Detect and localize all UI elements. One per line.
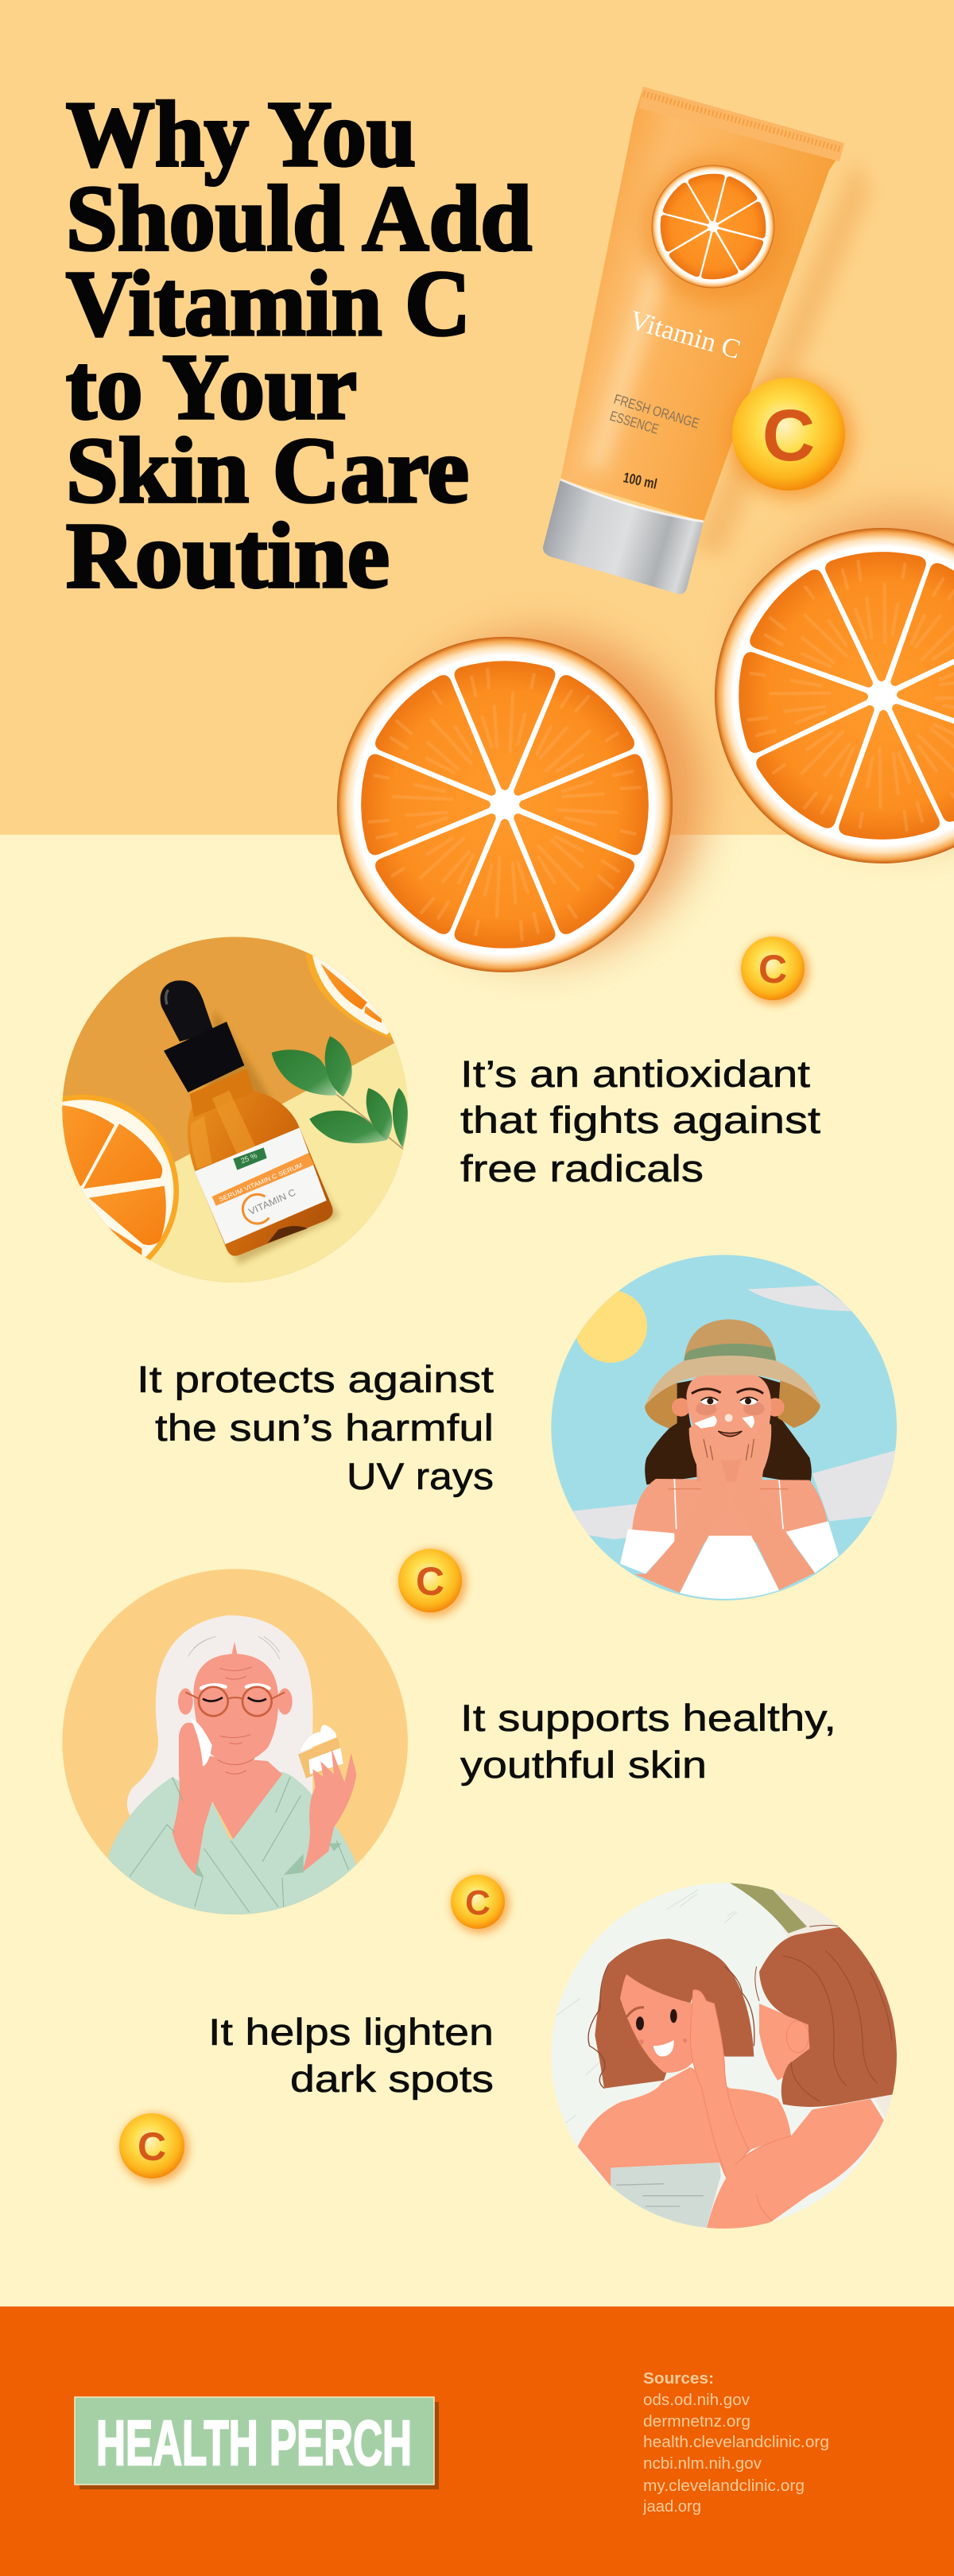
main cream background [0, 835, 954, 2307]
shadow: centre orange [378, 632, 704, 958]
logo: Health Perch [75, 2397, 439, 2489]
text: UV protection: UV rays [347, 1455, 494, 1497]
text: dark spots: It helps lighten [208, 2011, 494, 2053]
back person hair [759, 1926, 898, 2107]
sources list: health.clevelandclinic.org [643, 2434, 829, 2451]
icon: right orange slice [706, 519, 954, 872]
illustration: serum bottle [62, 937, 408, 1282]
icon: large vitamin C ball [731, 377, 852, 498]
sources list: my.clevelandclinic.org [643, 2477, 805, 2495]
icon: vitamin C ball small 1 [741, 937, 809, 1005]
title: to Your [66, 335, 357, 439]
text: UV protection: the sun’s harmful [155, 1406, 494, 1449]
tube brand text: Vitamin C [626, 305, 743, 365]
white top [680, 1536, 779, 1599]
hat [684, 1319, 777, 1362]
clouds [747, 1286, 855, 1311]
icon: centre orange slice [337, 637, 673, 972]
title: Should Add [66, 166, 532, 270]
text: antioxidant: free radicals [460, 1147, 704, 1189]
towel [611, 2163, 721, 2229]
illustration: serum bottle: 25 % [239, 1151, 258, 1165]
text: antioxidant: It’s an antioxidant [460, 1053, 810, 1095]
back person face [759, 2004, 809, 2081]
top background band [0, 0, 954, 835]
closed eyes [203, 1697, 266, 1701]
hands [688, 1426, 704, 1465]
body [578, 2067, 791, 2186]
robe [109, 1771, 356, 1916]
tube orange slice [644, 157, 782, 296]
tube body [560, 87, 844, 522]
smile [653, 2040, 674, 2057]
mouth [718, 1431, 742, 1437]
panel: youthful skin [61, 1568, 836, 1916]
robe sleeves and lines [196, 1843, 342, 1878]
bottle glass [188, 1091, 333, 1256]
text: UV protection [137, 1358, 494, 1497]
icon: vitamin C tube [543, 87, 871, 594]
eyes [636, 2016, 644, 2031]
text: youthful skin: It supports healthy, [460, 1697, 836, 1739]
icon: vitamin C ball small 4: C [138, 2124, 166, 2169]
shoulders [624, 1479, 831, 1542]
hand left [173, 1723, 213, 1875]
icon: vitamin C ball small 3 [451, 1875, 510, 1934]
face [620, 1974, 717, 2073]
panel: antioxidant [0, 936, 820, 1288]
jar [298, 1737, 343, 1779]
illustration: woman at mirror [550, 1882, 898, 2230]
brim underside [645, 1382, 677, 1429]
ears and face [672, 1398, 690, 1417]
sources list [642, 2370, 829, 2516]
title: Skin Care [66, 418, 469, 522]
neck [696, 1458, 762, 1480]
ears and face [178, 1688, 193, 1715]
tube description: FRESH ORANGE [612, 391, 701, 432]
panel: UV protection [137, 1254, 898, 1602]
hand [690, 1990, 749, 2181]
icon: vitamin C ball small 2 [398, 1549, 467, 1617]
title [66, 82, 532, 607]
front hair [595, 1938, 754, 2089]
hair back [645, 1380, 696, 1485]
title: Routine [66, 503, 390, 607]
dropper collar [164, 1022, 244, 1092]
slice top right [306, 952, 391, 1038]
footer band [0, 2306, 954, 2576]
hand right [302, 1748, 356, 1872]
back person body [706, 2099, 884, 2230]
title: Vitamin C [66, 251, 471, 355]
text: dark spots: dark spots [290, 2058, 494, 2100]
arms [634, 1541, 704, 1593]
sunscreen [694, 1416, 717, 1429]
text: antioxidant: that fights against [460, 1099, 820, 1141]
sources list: ods.od.nih.gov [643, 2392, 750, 2409]
icon: vitamin C ball small 2: C [416, 1559, 444, 1604]
text: youthful skin [460, 1697, 836, 1786]
illustration: serum bottle: VITAMIN C [247, 1186, 297, 1217]
tube volume: 100 ml [622, 469, 658, 492]
tube description: ESSENCE [608, 408, 661, 437]
dropper bulb [161, 980, 214, 1042]
tube crimp [639, 87, 844, 161]
text: UV protection: It protects against [137, 1358, 494, 1400]
sources list: Sources: [643, 2370, 714, 2388]
bottle shadow [199, 1010, 339, 1264]
title: Why You [66, 82, 416, 186]
icon: vitamin C ball small 4 [119, 2113, 189, 2183]
leaves [272, 1036, 408, 1149]
panel: dark spots [208, 1882, 898, 2230]
brows [201, 1686, 269, 1688]
glasses [199, 1687, 228, 1716]
shadow: right orange [741, 509, 954, 840]
brows and eyes [692, 1389, 763, 1394]
slice bottom left [62, 1094, 179, 1260]
illustration: older woman with cream [61, 1568, 409, 1916]
illustration: serum bottle: SERUM VITAMIN C SERUM [218, 1162, 304, 1204]
sources list: ncbi.nlm.nih.gov [643, 2455, 762, 2473]
icon: vitamin C ball small 1: C [758, 947, 787, 991]
bottle label [195, 1127, 327, 1244]
icon: large vitamin C ball: C [762, 395, 815, 476]
neck [204, 1755, 282, 1839]
hair [127, 1616, 313, 1815]
tube highlight [595, 254, 661, 469]
sources list: dermnetnz.org [643, 2413, 750, 2431]
text: youthful skin: youthful skin [460, 1744, 707, 1786]
icon: vitamin C ball small 3: C [465, 1884, 491, 1922]
text: dark spots [208, 2011, 494, 2100]
illustration: woman applying sunscreen [550, 1254, 898, 1602]
sources list: jaad.org [642, 2498, 701, 2516]
tube silver cap [543, 479, 704, 594]
logo: Health Perch: HEALTH PERCH [96, 2407, 412, 2478]
text: antioxidant [460, 1053, 820, 1189]
